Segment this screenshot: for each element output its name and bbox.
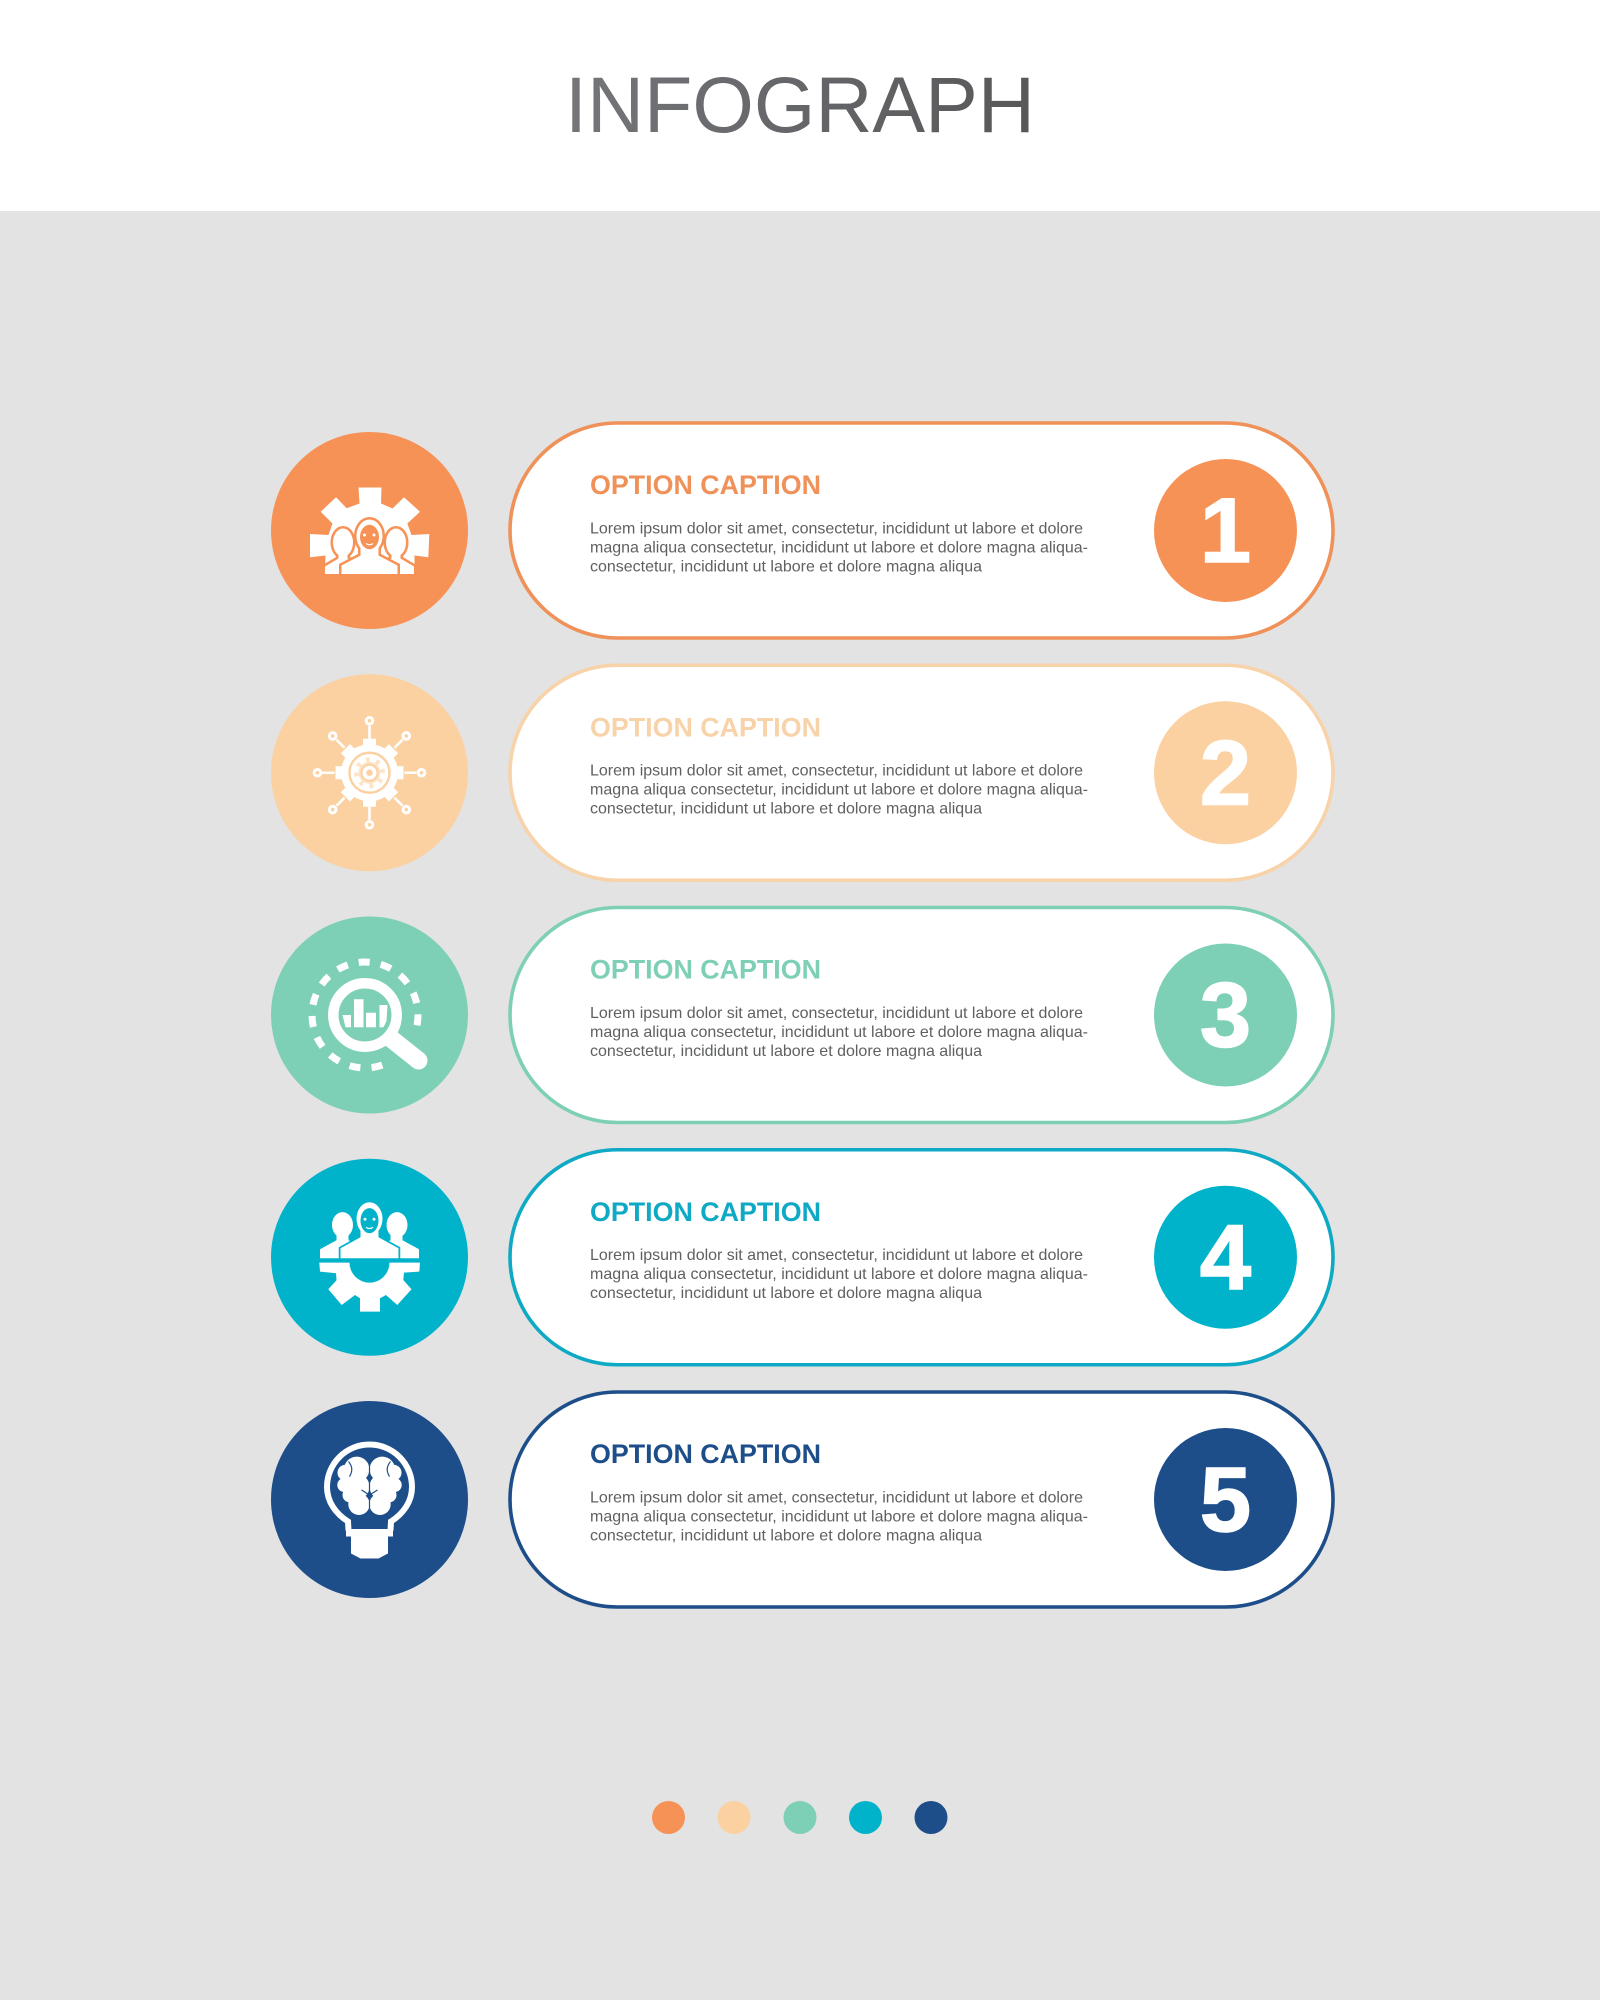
panel: option 2: [271, 665, 1333, 880]
panel: option 4: [271, 1150, 1333, 1365]
number badge: [1154, 944, 1297, 1086]
pill outline: [510, 1150, 1333, 1365]
text block: consectetur, incididunt ut labore et dolore magna aliqua: [590, 1043, 982, 1060]
number badge: [1154, 1428, 1297, 1571]
text block: Lorem ipsum dolor sit amet, consectetur, incididunt ut labore et dolore: [590, 520, 1083, 537]
panel: option 3: [271, 908, 1333, 1122]
text block: [590, 1247, 1088, 1302]
text block: magna aliqua consectetur, incididunt ut labore et dolore magna aliqua-: [590, 539, 1088, 556]
text block: Lorem ipsum dolor sit amet, consectetur, incididunt ut labore et dolore: [590, 763, 1083, 780]
pill outline: [510, 665, 1333, 880]
colour dots legend: [652, 1801, 948, 1834]
text block: magna aliqua consectetur, incididunt ut labore et dolore magna aliqua-: [590, 782, 1088, 799]
pill outline: [510, 423, 1333, 638]
text block: consectetur, incididunt ut labore et dolore magna aliqua: [590, 1527, 982, 1544]
heading: OPTION CAPTION: [590, 712, 821, 742]
number badge: [1154, 701, 1297, 844]
icon: magnifier with bars: [271, 916, 468, 1114]
heading: OPTION CAPTION: [590, 1439, 821, 1469]
number badge: 4: [1200, 1207, 1251, 1309]
icon: team above gear: [271, 1159, 468, 1356]
text block: [590, 1489, 1088, 1544]
text block: Lorem ipsum dolor sit amet, consectetur, incididunt ut labore et dolore: [590, 1247, 1083, 1264]
text block: magna aliqua consectetur, incididunt ut labore et dolore magna aliqua-: [590, 1266, 1088, 1283]
text block: consectetur, incididunt ut labore et dolore magna aliqua: [590, 801, 982, 818]
number badge: 3: [1200, 964, 1251, 1066]
icon: gear network: [271, 674, 468, 871]
panel: option 5: [271, 1392, 1333, 1607]
text block: Lorem ipsum dolor sit amet, consectetur, incididunt ut labore et dolore: [590, 1005, 1083, 1022]
number badge: 2: [1200, 722, 1251, 824]
title: INFOGRAPH: [565, 60, 1035, 149]
text block: [590, 763, 1088, 818]
panel: option 1: [271, 423, 1333, 638]
text block: Lorem ipsum dolor sit amet, consectetur, incididunt ut labore et dolore: [590, 1489, 1083, 1506]
heading: OPTION CAPTION: [590, 954, 821, 984]
icon: brain in light bulb: [271, 1401, 468, 1598]
number badge: [1154, 1186, 1297, 1329]
pill outline: [510, 908, 1333, 1122]
heading: OPTION CAPTION: [590, 1197, 821, 1227]
pill outline: [510, 1392, 1333, 1607]
text block: consectetur, incididunt ut labore et dolore magna aliqua: [590, 558, 982, 575]
number badge: 5: [1200, 1449, 1251, 1551]
text block: [590, 520, 1088, 575]
text block: magna aliqua consectetur, incididunt ut labore et dolore magna aliqua-: [590, 1024, 1088, 1041]
text block: [590, 1005, 1088, 1060]
number badge: 1: [1200, 480, 1251, 582]
icon: gear with people: [271, 432, 468, 629]
text block: consectetur, incididunt ut labore et dolore magna aliqua: [590, 1285, 982, 1302]
header band: [0, 0, 1600, 211]
number badge: [1154, 459, 1297, 602]
heading: OPTION CAPTION: [590, 470, 821, 500]
text block: magna aliqua consectetur, incididunt ut labore et dolore magna aliqua-: [590, 1508, 1088, 1525]
